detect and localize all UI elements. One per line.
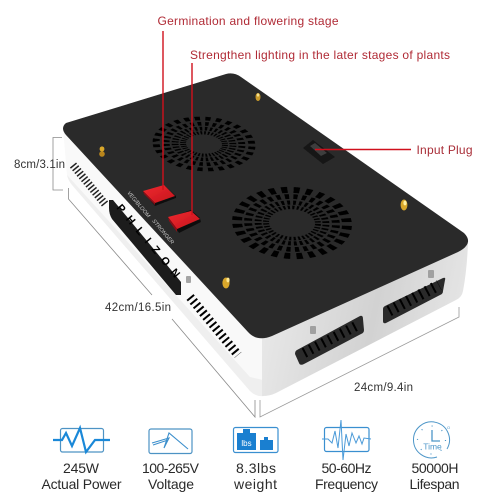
spec: frequency: Frequency <box>315 476 378 492</box>
left side lower band <box>67 175 264 396</box>
brand plate: PHLIZON <box>114 202 182 280</box>
callout line: input plug <box>315 148 411 150</box>
spec: lifespan: Lifespan <box>410 476 460 492</box>
fan vent: rear <box>155 116 253 172</box>
spec: frequency: 50-60Hz <box>322 460 372 476</box>
icon: power waveform <box>53 428 110 452</box>
spec: voltage <box>142 429 200 492</box>
spec: power <box>42 428 122 492</box>
icon: clock: Time <box>423 442 442 452</box>
callout line: germination <box>162 31 164 190</box>
spec: voltage: Voltage <box>148 476 194 492</box>
dimension: length <box>68 188 255 417</box>
fan vent: front <box>235 187 349 259</box>
icon: frequency wave <box>322 420 371 460</box>
switch: stronger <box>168 210 201 233</box>
dimension: height <box>14 138 65 190</box>
switch label: stronger: STRONGER <box>150 218 175 246</box>
spec: weight <box>233 428 278 492</box>
spec: power: 245W <box>63 460 100 476</box>
metal clip <box>428 270 434 278</box>
icon: weights: lbs <box>241 439 252 448</box>
metal clip <box>310 326 316 334</box>
icon: clock <box>413 422 450 458</box>
gold screw <box>401 200 407 210</box>
input plug socket <box>303 140 335 164</box>
side vent: left lower <box>190 297 238 355</box>
dimension: length: 42cm/16.5in <box>105 302 171 314</box>
spec: weight: 8.3lbs <box>236 460 276 476</box>
spec: frequency <box>315 420 378 492</box>
spec: lifespan: 50000H <box>412 460 458 476</box>
callout: strengthen: Strengthen lighting in the later stages of plants <box>190 48 450 62</box>
spec: voltage: 100-265V <box>142 460 200 476</box>
dimension: height: 8cm/3.1in <box>14 159 65 171</box>
switch label: veg/bloom: VEG/BLOOM <box>125 190 151 219</box>
spec: power: Actual Power <box>42 476 122 492</box>
left side face <box>63 128 264 396</box>
side window: left <box>295 316 364 365</box>
callout: germination: Germination and flowering stage <box>158 14 339 28</box>
light fixture <box>63 73 468 396</box>
icon: voltage bolt <box>149 429 192 454</box>
dimension: width <box>260 307 459 417</box>
gold screw <box>99 146 105 157</box>
gold screw <box>222 278 230 288</box>
spec: weight: weight <box>233 476 277 492</box>
spec: lifespan <box>410 422 460 492</box>
metal clip <box>186 276 191 283</box>
side vent: left upper <box>73 165 105 204</box>
switch: veg/bloom <box>143 185 176 206</box>
callout: input plug: Input Plug <box>416 143 472 157</box>
right side face <box>262 243 468 396</box>
gold screw <box>256 93 260 101</box>
side window: right <box>383 278 445 323</box>
callout line: strengthen <box>191 63 193 215</box>
icon: clock: O <box>447 425 450 430</box>
dimension: width: 24cm/9.4in <box>354 382 413 394</box>
black top panel <box>63 73 468 338</box>
